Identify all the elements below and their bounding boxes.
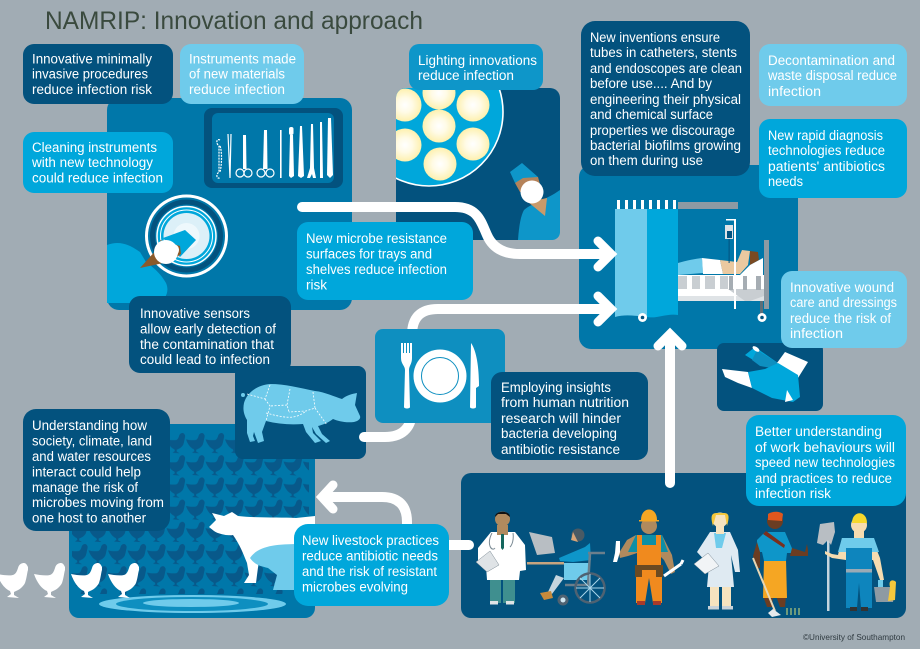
text: new inventions: and chemical surface <box>590 107 713 122</box>
text: understanding society <box>23 409 170 531</box>
text: wound care <box>781 271 907 348</box>
text: human nutrition: bacteria developing <box>501 426 617 441</box>
pond <box>99 595 286 613</box>
text: lighting innovations: reduce infection <box>418 68 514 83</box>
calf <box>250 544 300 590</box>
text: cleaning instruments: could reduce infection <box>32 170 163 186</box>
text: new inventions: and endoscopes are clean <box>590 61 742 76</box>
text: new inventions <box>581 21 750 176</box>
arrow: pig and food to hospital <box>364 296 611 437</box>
text: new materials: Instruments made <box>189 52 296 66</box>
text: understanding society: interact could help <box>32 464 141 480</box>
text: lighting innovations <box>409 44 543 90</box>
text: cleaning instruments: with new technology <box>31 155 153 170</box>
text: understanding society: microbes moving from <box>32 495 164 510</box>
iv stand <box>725 219 736 309</box>
text: new inventions: engineering their physical <box>590 92 741 107</box>
text: new microbe surfaces: risk <box>306 278 327 292</box>
text: human nutrition <box>491 372 648 460</box>
text: human nutrition: Employing insights <box>501 380 611 395</box>
text: cleaning instruments <box>23 132 173 193</box>
text: rapid diagnosis: patients' antibiotics <box>768 159 885 174</box>
icon: overhead surgeon with lamp <box>107 196 226 303</box>
surgeon looking up <box>510 163 560 240</box>
text: new livestock practices: reduce antibiotic needs <box>302 548 438 564</box>
text: wound care: care and dressings <box>790 295 897 310</box>
doctor <box>476 512 526 604</box>
text: understanding society: and water resources <box>32 449 151 464</box>
text: understanding society: manage the risk of <box>32 480 138 495</box>
panel: wound dressing <box>717 343 823 411</box>
text: understanding society: one host to another <box>32 510 146 526</box>
text: cleaning instruments: Cleaning instruments <box>32 140 157 155</box>
text: decontamination: infection <box>768 84 821 99</box>
text: new livestock practices <box>294 524 449 606</box>
text: new materials: of new materials <box>189 66 285 82</box>
title: NAMRIP: Innovation and approach <box>45 7 423 35</box>
text: understanding society: Understanding how <box>32 418 147 433</box>
text: new materials: reduce infection <box>189 82 285 97</box>
text: new livestock practices: New livestock practices <box>302 533 439 548</box>
text: new inventions: tubes in catheters, stents <box>590 45 737 60</box>
text: new inventions: bacterial biofilms growing <box>590 138 741 153</box>
icon: pig <box>241 384 360 443</box>
text: human nutrition: research will hinder <box>501 411 622 426</box>
text: minimally invasive: reduce infection risk <box>32 82 152 97</box>
text: understanding society: society, climate, land <box>32 434 152 448</box>
text: rapid diagnosis <box>759 119 907 198</box>
text: wound care: infection <box>790 326 843 341</box>
icon: fork <box>401 343 412 408</box>
cleaner with mop <box>817 513 896 611</box>
panel: instruments <box>107 98 352 310</box>
text: decontamination: waste disposal reduce <box>767 68 897 83</box>
text: rapid diagnosis: New rapid diagnosis <box>768 128 883 143</box>
bed with patient <box>638 219 769 322</box>
text: new materials <box>180 44 304 104</box>
builder <box>613 510 683 605</box>
text: human nutrition: antibiotic resistance <box>501 442 620 457</box>
text: innovative sensors <box>129 296 291 373</box>
panel: hospital room <box>579 165 798 349</box>
text: innovative sensors: Innovative sensors <box>140 306 250 321</box>
instrument tray <box>204 108 343 188</box>
copyright: ©University of Southampton <box>803 632 905 642</box>
text: work behaviours: Better understanding <box>755 424 882 439</box>
text: work behaviours: speed new technologies <box>755 455 895 470</box>
panel: pig <box>235 366 366 459</box>
text: new microbe surfaces: New microbe resistance <box>306 231 447 246</box>
connector: workers to livestock <box>446 540 469 550</box>
text: new livestock practices: microbes evolving <box>302 580 408 594</box>
text: decontamination <box>759 44 907 106</box>
text: rapid diagnosis: technologies reduce <box>768 143 885 158</box>
text: minimally invasive: invasive procedures <box>32 66 148 82</box>
icon: knife <box>470 343 479 408</box>
text: decontamination: Decontamination and <box>768 53 895 68</box>
farm worker <box>753 512 808 617</box>
text: work behaviours: and practices to reduce <box>755 471 892 486</box>
surgical lamp <box>396 88 504 187</box>
text: new microbe surfaces <box>297 222 473 300</box>
panel: workers <box>461 473 906 618</box>
text: innovative sensors: allow early detection of <box>140 322 276 336</box>
text: rapid diagnosis: needs <box>768 174 803 189</box>
text: lighting innovations: Lighting innovations <box>418 53 537 68</box>
nurse <box>694 512 740 610</box>
icon: plate <box>414 350 466 402</box>
bed wheels <box>638 313 766 322</box>
text: work behaviours: infection risk <box>755 486 831 501</box>
arrow: livestock to chickens <box>322 485 407 526</box>
panel: chickens and cattle <box>69 424 315 618</box>
text: human nutrition: from human nutrition <box>501 395 629 410</box>
panel: food plate <box>375 329 505 423</box>
arrow: instruments and lighting to hospital <box>302 207 611 267</box>
text: minimally invasive <box>23 44 173 104</box>
text: new inventions: before use.... And by <box>590 76 712 91</box>
text: minimally invasive: Innovative minimally <box>32 52 152 66</box>
text: new inventions: New inventions ensure <box>590 30 720 45</box>
arrow: workers to hospital <box>658 334 682 483</box>
text: work behaviours <box>746 415 906 506</box>
text: work behaviours: of work behaviours will <box>755 440 895 455</box>
text: new microbe surfaces: shelves reduce infection <box>306 262 447 277</box>
white chickens <box>0 563 139 598</box>
cow <box>209 512 315 583</box>
wheelchair user at computer <box>527 528 605 606</box>
text: wound care: reduce the risk of <box>790 311 891 326</box>
text: innovative sensors: could lead to infection <box>140 352 270 367</box>
text: wound care: Innovative wound <box>790 280 894 295</box>
curtain <box>615 200 678 317</box>
text: new livestock practices: and the risk of resistant <box>302 564 437 579</box>
text: new inventions: on them during use <box>590 153 703 168</box>
panel: lighting <box>396 88 560 240</box>
text: innovative sensors: the contamination that <box>140 337 274 352</box>
text: new microbe surfaces: surfaces for trays and <box>306 246 432 262</box>
text: new inventions: properties we discourage <box>590 123 735 138</box>
curtain rail <box>678 202 738 209</box>
